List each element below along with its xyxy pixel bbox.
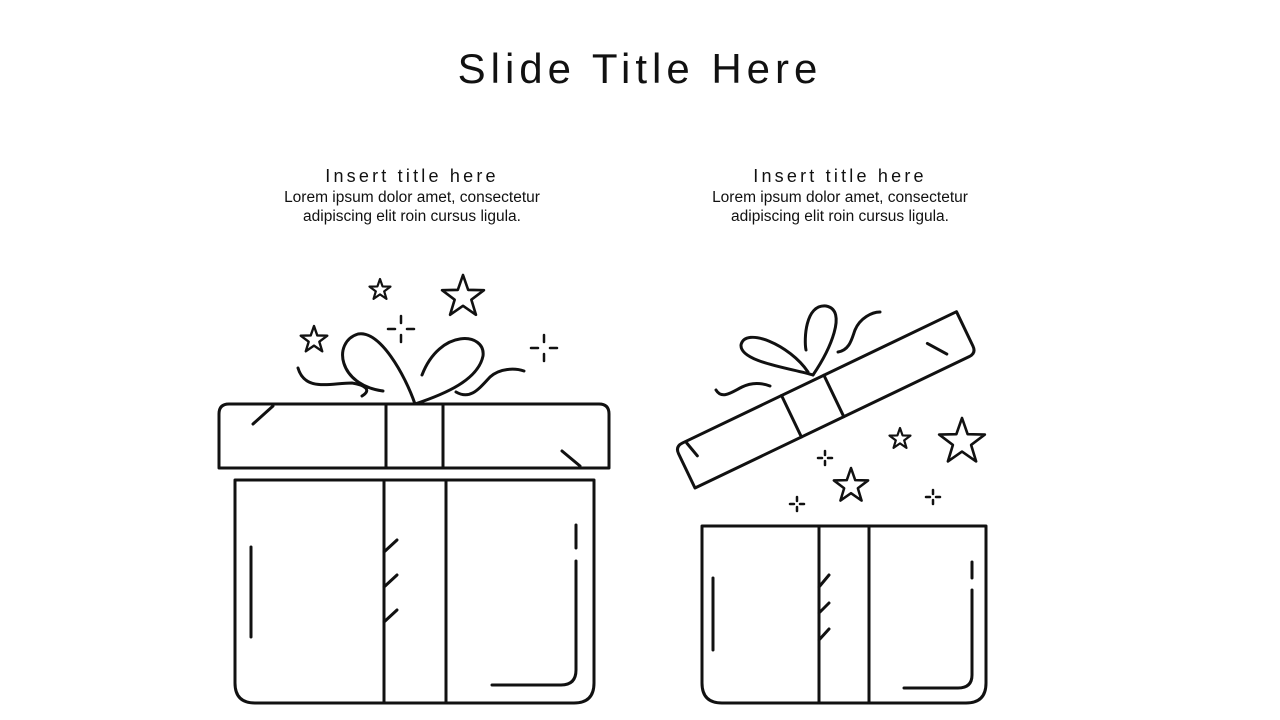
text block: left: Insert title here	[325, 166, 499, 186]
text block: right: Lorem ipsum dolor amet, consectetur	[712, 189, 968, 206]
title: Slide Title Here	[458, 45, 822, 92]
text block: left	[284, 166, 540, 225]
text block: right: Insert title here	[753, 166, 927, 186]
text block: left: adipiscing elit roin cursus ligula.	[303, 208, 521, 225]
icon: open gift	[675, 306, 986, 703]
text block: right: adipiscing elit roin cursus ligula.	[731, 208, 949, 225]
icon: closed gift	[219, 275, 609, 703]
text block: right	[712, 166, 968, 225]
text block: left: Lorem ipsum dolor amet, consectetur	[284, 189, 540, 206]
